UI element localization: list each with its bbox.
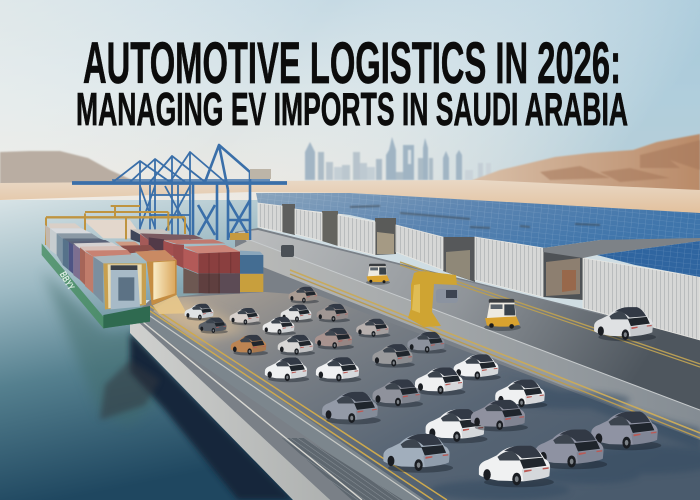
autonomous yellow carriers — [281, 245, 521, 331]
open orange container — [135, 250, 187, 314]
front solar panel — [597, 241, 700, 277]
yellow gantry rails — [46, 206, 185, 245]
solar roof — [256, 193, 700, 248]
hull — [42, 243, 150, 328]
red container stack — [183, 245, 263, 293]
title — [76, 31, 628, 135]
left mountains — [0, 151, 135, 185]
warehouses with solar roof — [256, 193, 700, 340]
rear dark stacks — [115, 229, 225, 268]
right desert mountains — [470, 134, 700, 192]
desert sand — [0, 180, 700, 214]
front container side — [93, 257, 103, 303]
hull name: BBYY — [57, 269, 77, 292]
electric vehicle fleet — [185, 287, 661, 487]
container ship — [42, 206, 263, 328]
road lane markings — [250, 240, 700, 438]
pale back stack — [83, 220, 143, 238]
gantry cranes — [72, 145, 287, 240]
city skyline — [305, 137, 491, 180]
quay walkway — [130, 306, 447, 500]
open front container with vehicle cargo — [103, 263, 146, 309]
roof edge strip — [543, 238, 700, 258]
row containers — [45, 223, 131, 293]
sky background — [0, 0, 700, 215]
small grey van — [436, 289, 458, 303]
front container lid — [93, 254, 142, 263]
yellow robotic arm — [408, 271, 457, 327]
sea — [0, 200, 300, 500]
road shadows and reflections — [430, 375, 700, 500]
warehouse openings — [282, 204, 583, 300]
crane machinery — [230, 169, 271, 240]
warehouse walls — [258, 203, 700, 340]
dock ground — [130, 228, 700, 500]
